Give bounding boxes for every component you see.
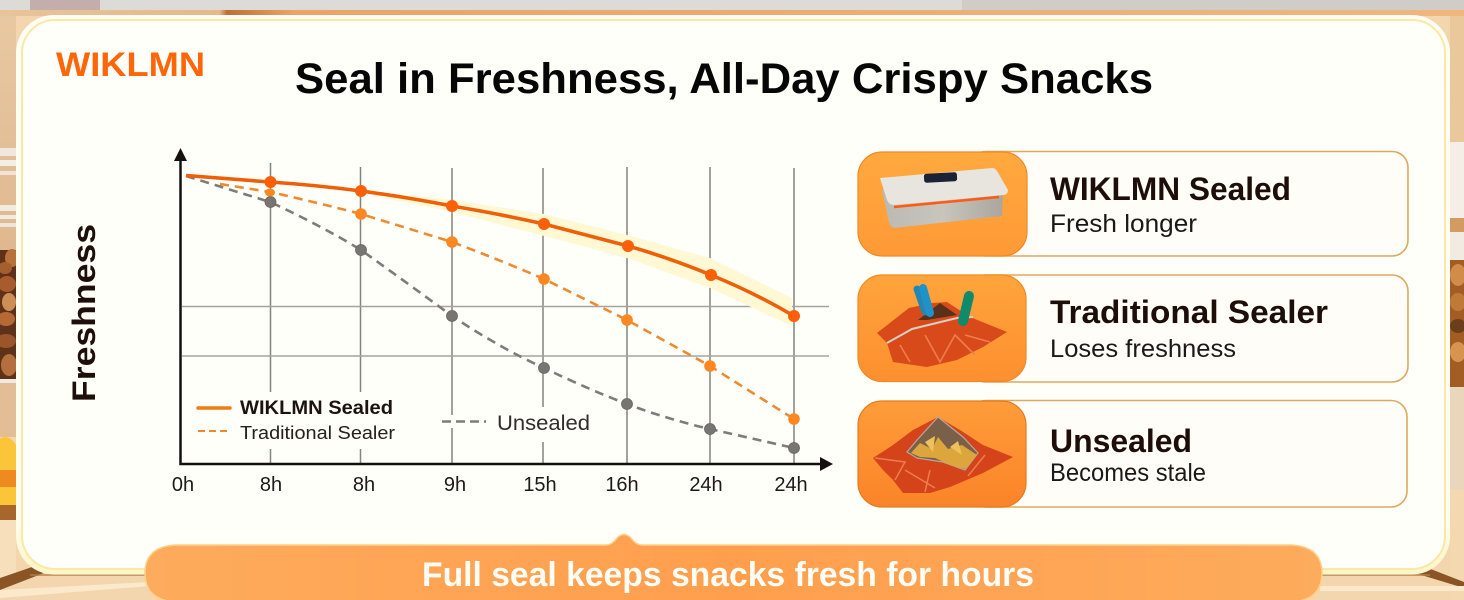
banner text: Full seal keeps snacks fresh for hours — [422, 556, 1034, 594]
x axis labels: 8h — [260, 474, 282, 496]
axes — [174, 148, 833, 471]
legend: unsealed: Unsealed — [497, 412, 590, 435]
x axis labels: 24h — [689, 474, 723, 496]
icon panel: clipped chip bag — [858, 275, 1026, 382]
series: traditional sealer — [220, 184, 800, 425]
series: unsealed — [186, 176, 800, 454]
grid lines — [182, 163, 829, 464]
x axis labels — [172, 474, 808, 496]
legend: WIKLMN sealed: WIKLMN Sealed — [240, 398, 393, 419]
x axis labels: 9h — [444, 474, 466, 496]
x axis labels: 8h — [353, 474, 375, 496]
caption: Becomes stale: Becomes stale — [1050, 459, 1206, 487]
legend: traditional sealer: Traditional Sealer — [240, 423, 395, 443]
x axis labels: 15h — [523, 474, 557, 496]
x axis labels: 16h — [605, 474, 639, 496]
caption: Loses freshness: Loses freshness — [1050, 335, 1236, 363]
icon panel: open chip bag — [858, 401, 1026, 507]
axis title: Freshness: Freshness — [66, 224, 102, 402]
series: WIKLMN sealed — [186, 176, 800, 322]
label: WIKLMN Sealed: WIKLMN Sealed — [1050, 171, 1291, 207]
x axis labels: 0h — [172, 474, 194, 496]
x axis labels: 24h — [774, 474, 808, 496]
bottom banner — [145, 534, 1322, 600]
caption: Fresh longer: Fresh longer — [1050, 210, 1197, 238]
panel: WIKLMN sealed — [858, 152, 1408, 256]
panel: unsealed — [858, 400, 1407, 507]
highlight band behind WIKLMN curve — [361, 190, 792, 326]
panel: traditional sealer — [858, 275, 1408, 382]
logo: WIKLMN: WIKLMN — [56, 46, 205, 84]
line chart: freshness over time — [66, 148, 833, 496]
title: Seal in Freshness, All-Day Crispy Snacks — [295, 55, 1153, 103]
label: Unsealed: Unsealed — [1050, 423, 1192, 459]
label: Traditional Sealer: Traditional Sealer — [1050, 294, 1328, 330]
icon panel: sealer device — [858, 152, 1027, 256]
